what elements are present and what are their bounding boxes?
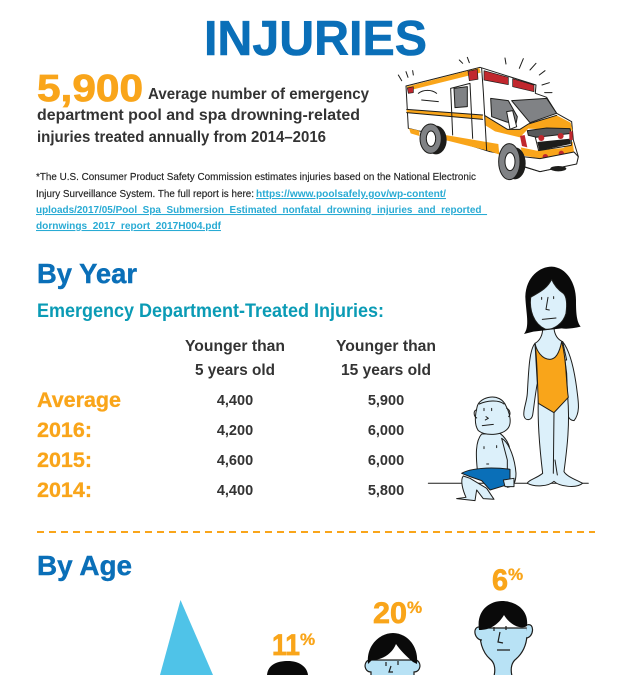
title: INJURIES xyxy=(204,12,427,66)
row: 2016: 6,000 xyxy=(368,423,404,439)
report link: dornwings_2017_report_2017H004.pdf xyxy=(36,220,221,232)
row: 2015: 4,600 xyxy=(217,453,253,469)
head: hair xyxy=(267,661,308,675)
table: injuries by year xyxy=(37,338,436,502)
report link xyxy=(36,188,487,232)
row: average: 5,900 xyxy=(368,393,404,409)
subheading: Emergency Department-Treated Injuries: xyxy=(37,301,384,322)
statistic description: department pool and spa drowning-related xyxy=(37,107,360,124)
row: 2016 xyxy=(37,419,404,442)
column headers: 5 years old xyxy=(195,362,275,379)
column headers: Younger than xyxy=(336,338,436,355)
row: 2016: 2016: xyxy=(37,419,92,442)
column headers: 15 years old xyxy=(341,362,431,379)
label: 11%: 11 xyxy=(272,629,300,662)
report link: https://www.poolsafely.gov/wp-content/ xyxy=(256,188,446,200)
row: 2014 xyxy=(37,479,404,502)
footnote: Injury Surveillance System. The full report is here: xyxy=(36,188,254,200)
illustration: child and teen at poolside xyxy=(428,267,588,501)
figure: 20 percent xyxy=(365,597,422,675)
label: 6%: % xyxy=(508,565,523,584)
row: 2016: 4,200 xyxy=(217,423,253,439)
footnote: *The U.S. Consumer Product Safety Commission estimates injuries based on the National Electronic xyxy=(36,171,476,183)
report link: uploads/2017/05/Pool_Spa_Submersion_Estimated_nonfatal_drowning_injuries_and_reported_ xyxy=(36,204,487,216)
statistic description: Average number of emergency xyxy=(148,86,369,103)
column headers: Younger than xyxy=(185,338,285,355)
child xyxy=(457,397,516,501)
row: average: 4,400 xyxy=(217,393,253,409)
row: average xyxy=(37,389,404,412)
divider xyxy=(37,531,595,533)
headline statistic xyxy=(37,68,369,146)
column headers xyxy=(185,338,436,379)
label: 20%: 20 xyxy=(373,597,407,630)
head xyxy=(365,633,420,675)
label: 11%: % xyxy=(300,630,315,649)
statistic description xyxy=(37,86,369,146)
footnote xyxy=(36,171,487,232)
statistic description: injuries treated annually from 2014–2016 xyxy=(37,129,326,146)
big number: 5,900 xyxy=(37,68,143,110)
triangle marker xyxy=(160,600,213,675)
figure: 11 percent xyxy=(267,629,315,675)
row: 2015 xyxy=(37,449,404,472)
row: 2015: 2015: xyxy=(37,449,92,472)
icon: ambulance xyxy=(398,57,578,180)
label: 6%: 6 xyxy=(492,564,508,597)
figure: 6 percent xyxy=(475,564,533,675)
teen xyxy=(524,267,583,486)
row: average: Average xyxy=(37,389,121,412)
heading: by age: By Age xyxy=(37,550,132,581)
heading: by year: By Year xyxy=(37,258,137,289)
row: 2014: 5,800 xyxy=(368,483,404,499)
head xyxy=(475,601,533,675)
row: 2014: 4,400 xyxy=(217,483,253,499)
row: 2014: 2014: xyxy=(37,479,92,502)
row: 2015: 6,000 xyxy=(368,453,404,469)
label: 20%: % xyxy=(407,598,422,617)
